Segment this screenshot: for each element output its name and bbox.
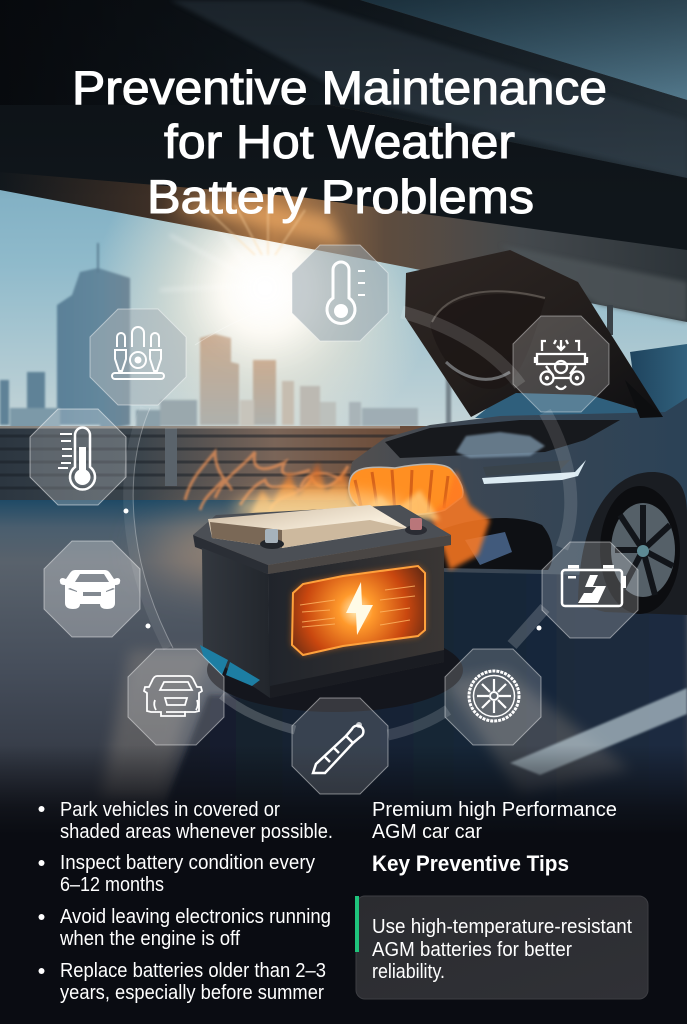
bullet: inspect battery [38,852,315,896]
icon card: engine tools [90,309,186,405]
connecting ring arcs [128,298,571,735]
title [72,61,607,223]
bullet list: preventive actions [38,799,333,1004]
callout panel: AGM tip [355,896,648,999]
bullet: replace batteries [38,960,326,1004]
product caption [372,799,617,843]
icon card: thermometer left [30,409,126,505]
callout panel: AGM tip: Use high-temperature-resistant [372,916,632,938]
title: for Hot Weather [164,115,515,168]
icon card: engine assembly [513,316,609,412]
title: Preventive Maintenance [72,61,607,114]
bullet: inspect battery: Inspect battery condition every [60,852,315,874]
icon card: car outline [128,649,224,745]
bullet: avoid electronics [38,906,331,950]
car with open hood [345,250,687,615]
product caption: AGM car car [372,821,482,843]
battery with glowing panel [193,505,463,712]
product caption: Premium high Performance [372,799,617,821]
bullet: park in shade: Park vehicles in covered or [60,799,280,821]
icon: lightning bolt [346,582,373,635]
icon card: wheel [445,649,541,745]
icon card: car front solid [44,541,140,637]
bullet: avoid electronics: Avoid leaving electronics running [60,906,331,928]
battery terminals [260,518,427,549]
flames behind battery [185,452,490,570]
icon card: thermometer top [292,245,388,341]
bullet: replace batteries: Replace batteries older than 2–3 [60,960,326,982]
bullet: replace batteries: years, especially before summer [60,982,324,1004]
heading: key preventive tips: Key Preventive Tips [372,851,569,876]
bullet: inspect battery: 6–12 months [60,874,164,896]
callout panel: AGM tip: reliability. [372,961,445,983]
bullet: avoid electronics: when the engine is off [59,928,240,950]
bullet: park in shade [38,799,333,843]
icon card: battery [542,542,638,638]
bullet: park in shade: shaded areas whenever possible. [60,821,333,843]
callout panel: AGM tip: AGM batteries for better [372,939,572,961]
ring junction dots [124,508,542,630]
icon card: wrench [292,698,388,794]
title: Battery Problems [147,170,534,223]
